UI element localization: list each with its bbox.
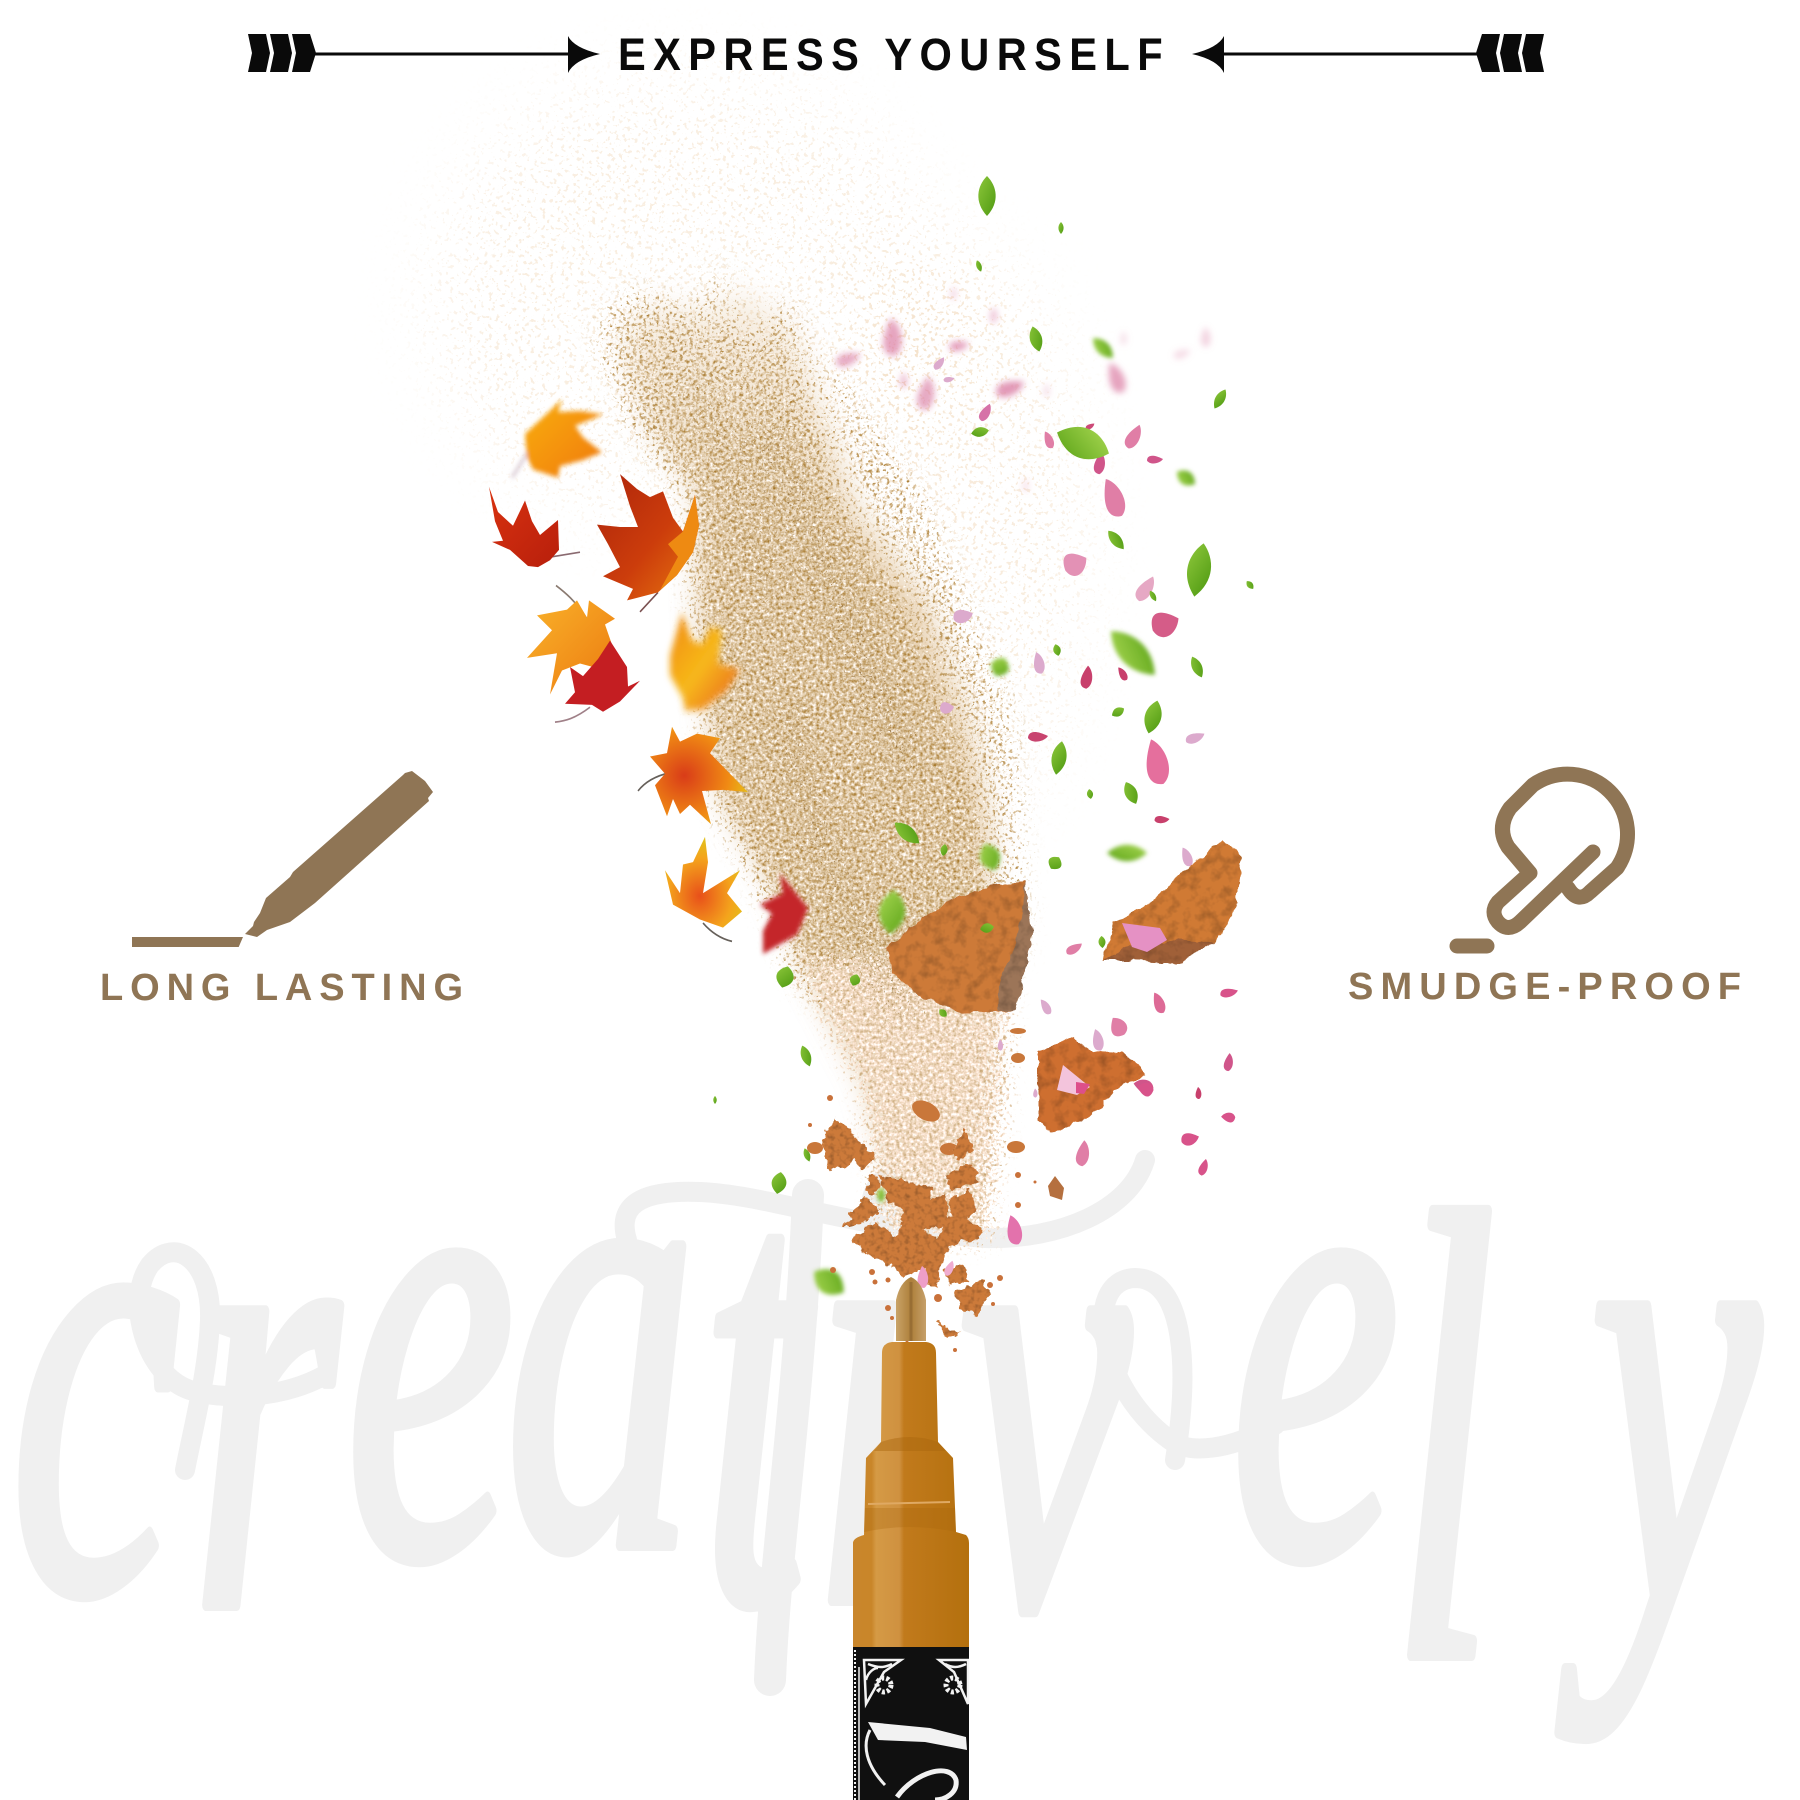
pen grip line xyxy=(868,1502,950,1504)
background flourish: t crossbar swoosh xyxy=(625,1160,1145,1240)
fingertip outline xyxy=(1494,774,1628,928)
maple leaf: red to yellow xyxy=(638,727,748,824)
rock: left large xyxy=(887,882,1032,1013)
green leaves xyxy=(713,176,1256,1302)
small chips xyxy=(807,1028,1026,1155)
leaf on rock xyxy=(979,922,995,934)
sand explosion xyxy=(430,70,1080,1240)
background word: creatively: creatively xyxy=(10,976,1764,1794)
right arrow decoration xyxy=(1192,34,1544,73)
left arrow decoration xyxy=(248,34,600,73)
blurred leaves xyxy=(807,334,1199,1302)
pen shading lower xyxy=(864,1508,956,1532)
maple leaf: crimson xyxy=(555,641,640,722)
pink petals xyxy=(834,286,1239,1246)
right arrow head xyxy=(1192,36,1224,73)
sand grain body xyxy=(600,259,985,1010)
pen nib centre line xyxy=(910,1282,912,1341)
title text: EXPRESS YOURSELF xyxy=(618,29,1170,80)
label: long lasting: LONG LASTING xyxy=(100,967,463,1009)
icon: finger smudge xyxy=(1457,774,1628,946)
pen shading xyxy=(874,1437,946,1451)
marker silhouette xyxy=(245,771,433,937)
maple leaf: red left xyxy=(489,487,580,567)
pen black label xyxy=(853,1647,969,1800)
icon: marker writing line xyxy=(132,771,433,947)
label: smudge-proof: SMUDGE-PROOF xyxy=(1348,966,1741,1008)
marker pen xyxy=(853,1277,969,1800)
fine dust cloud xyxy=(430,70,1080,830)
sharp rose petals xyxy=(977,402,1239,1246)
written line xyxy=(132,937,243,947)
panel: smudge-proof xyxy=(1348,774,1741,1008)
petal on right rock xyxy=(1122,923,1167,952)
maple leaf: blurred yellow-orange xyxy=(670,613,740,711)
pale lavender petals xyxy=(932,355,1206,1098)
blurred petals xyxy=(834,286,1211,492)
rock: right xyxy=(1103,839,1242,962)
panel: long lasting xyxy=(100,771,463,1009)
petal on lower rock xyxy=(1057,1065,1155,1098)
right arrow fletching xyxy=(1476,34,1544,72)
cream sand funnel xyxy=(800,960,1005,1240)
maple leaf: yellow xyxy=(665,837,742,941)
background flourish: long t stem xyxy=(770,1195,808,1680)
left arrow fletching xyxy=(248,34,316,72)
crumbled powder clump xyxy=(822,1117,990,1337)
pen label ornaments xyxy=(855,1650,968,1800)
left arrow shaft xyxy=(310,52,572,56)
header: express yourself xyxy=(248,29,1544,80)
soft sand base xyxy=(620,290,990,1170)
maple leaf: blurred orange xyxy=(512,400,603,478)
right arrow shaft xyxy=(1220,52,1482,56)
sharp leaves xyxy=(713,176,1256,1195)
left arrow head xyxy=(568,36,600,73)
pen nib xyxy=(896,1277,926,1341)
darker sand streaks xyxy=(700,400,905,1000)
maple leaf: blurred red xyxy=(760,874,808,954)
rock fragment xyxy=(1048,1176,1064,1200)
pen tip cone xyxy=(853,1342,969,1650)
sand spread on right xyxy=(800,330,1020,960)
pen logo strokes xyxy=(866,1722,967,1800)
maple leaf: big red-orange xyxy=(597,474,699,612)
smudge dash xyxy=(1457,938,1487,954)
autumn maple leaves xyxy=(489,400,808,954)
maple leaf: orange xyxy=(527,585,615,695)
background flourish: left loop xyxy=(139,1252,325,1470)
bricks and rocks xyxy=(807,839,1242,1352)
powder crumbs xyxy=(808,1095,1036,1352)
background flourish: upper loop xyxy=(1103,1278,1275,1460)
petals in clump xyxy=(918,1259,956,1288)
rock: lower xyxy=(1038,1038,1145,1133)
